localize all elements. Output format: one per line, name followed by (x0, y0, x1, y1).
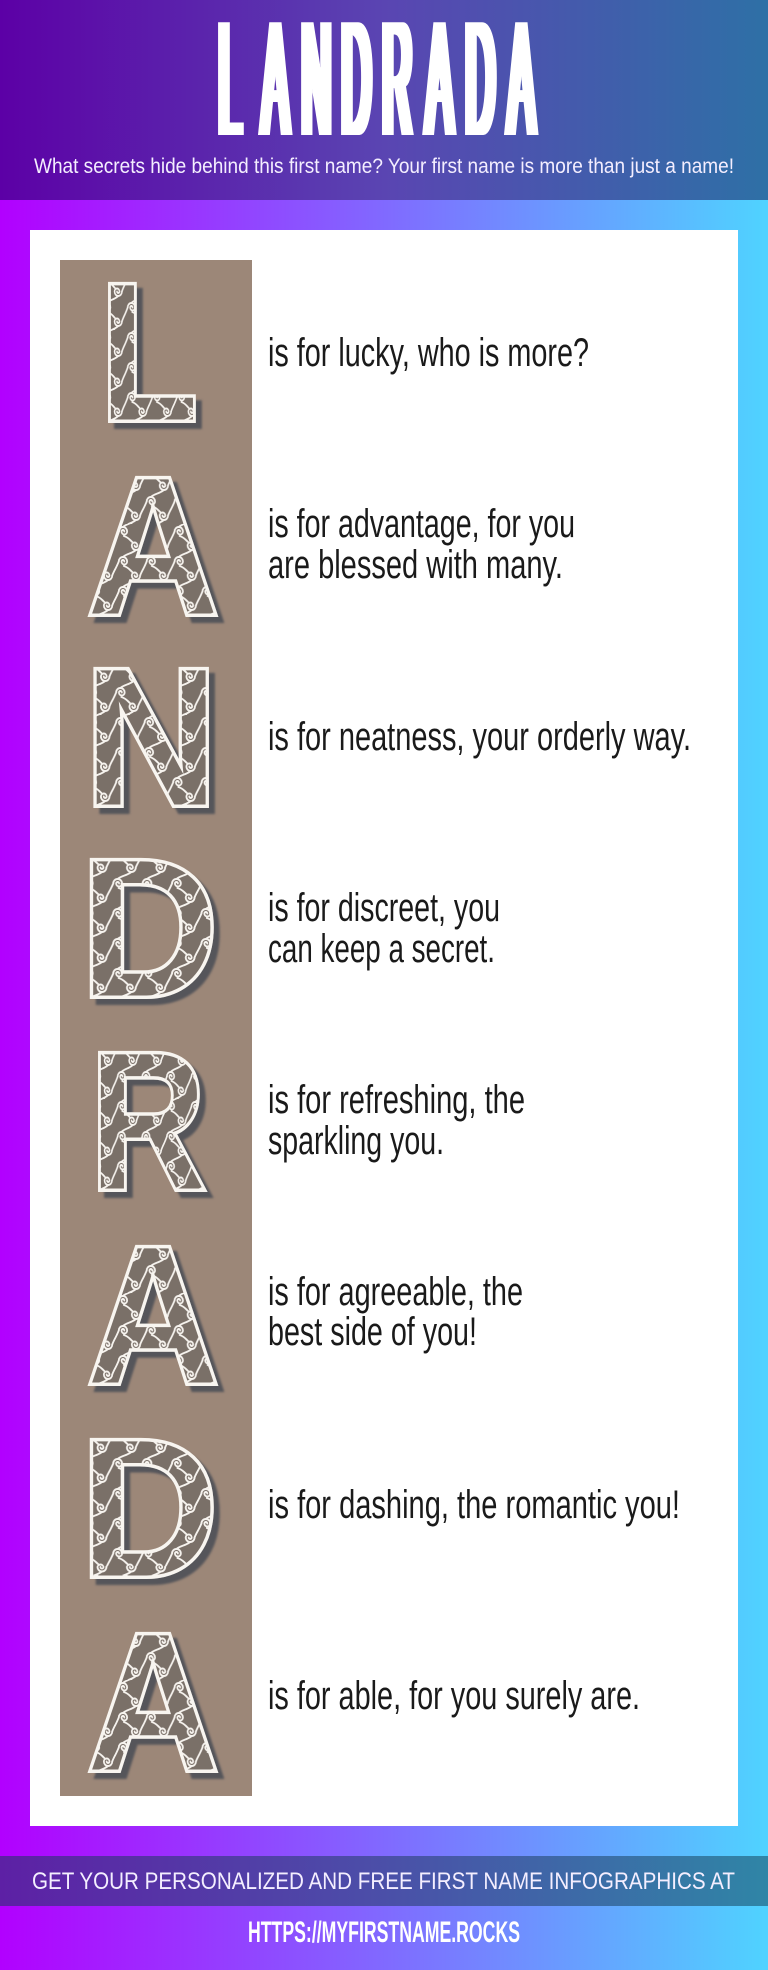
text: R meaning: sparkling you. (268, 1119, 444, 1163)
text: L meaning: is for lucky, who is more? (268, 331, 589, 375)
text: A meaning second: best side of you! (268, 1310, 477, 1354)
header band (0, 0, 768, 200)
text: D meaning: is for discreet, you (268, 886, 500, 930)
ornate letter D: D (80, 819, 218, 1037)
ornate letter A: A (88, 1593, 219, 1811)
ornate letter N: N (84, 629, 218, 847)
text: A meaning (268, 502, 575, 587)
ornate letter D: D (80, 1399, 218, 1617)
footer url: HTTPS://MYFIRSTNAME.ROCKS (248, 1916, 520, 1949)
ornate letter A: A (88, 437, 219, 655)
text: A meaning second (268, 1270, 523, 1354)
ornate letter R: R (90, 1012, 206, 1230)
text: A meaning: are blessed with many. (268, 543, 563, 587)
panel: letter column (60, 243, 252, 1811)
text: D meaning (268, 886, 500, 971)
panel: white card (30, 230, 738, 1826)
ornate letter A: A (88, 1206, 219, 1424)
text: A meaning: is for advantage, for you (268, 502, 575, 546)
ornate letter L: L (100, 243, 198, 461)
text: R meaning (268, 1078, 525, 1163)
footer band (0, 1856, 768, 1906)
text: A meaning second: is for agreeable, the (268, 1270, 523, 1314)
text: R meaning: is for refreshing, the (268, 1078, 525, 1122)
text: D meaning: can keep a secret. (268, 927, 495, 971)
